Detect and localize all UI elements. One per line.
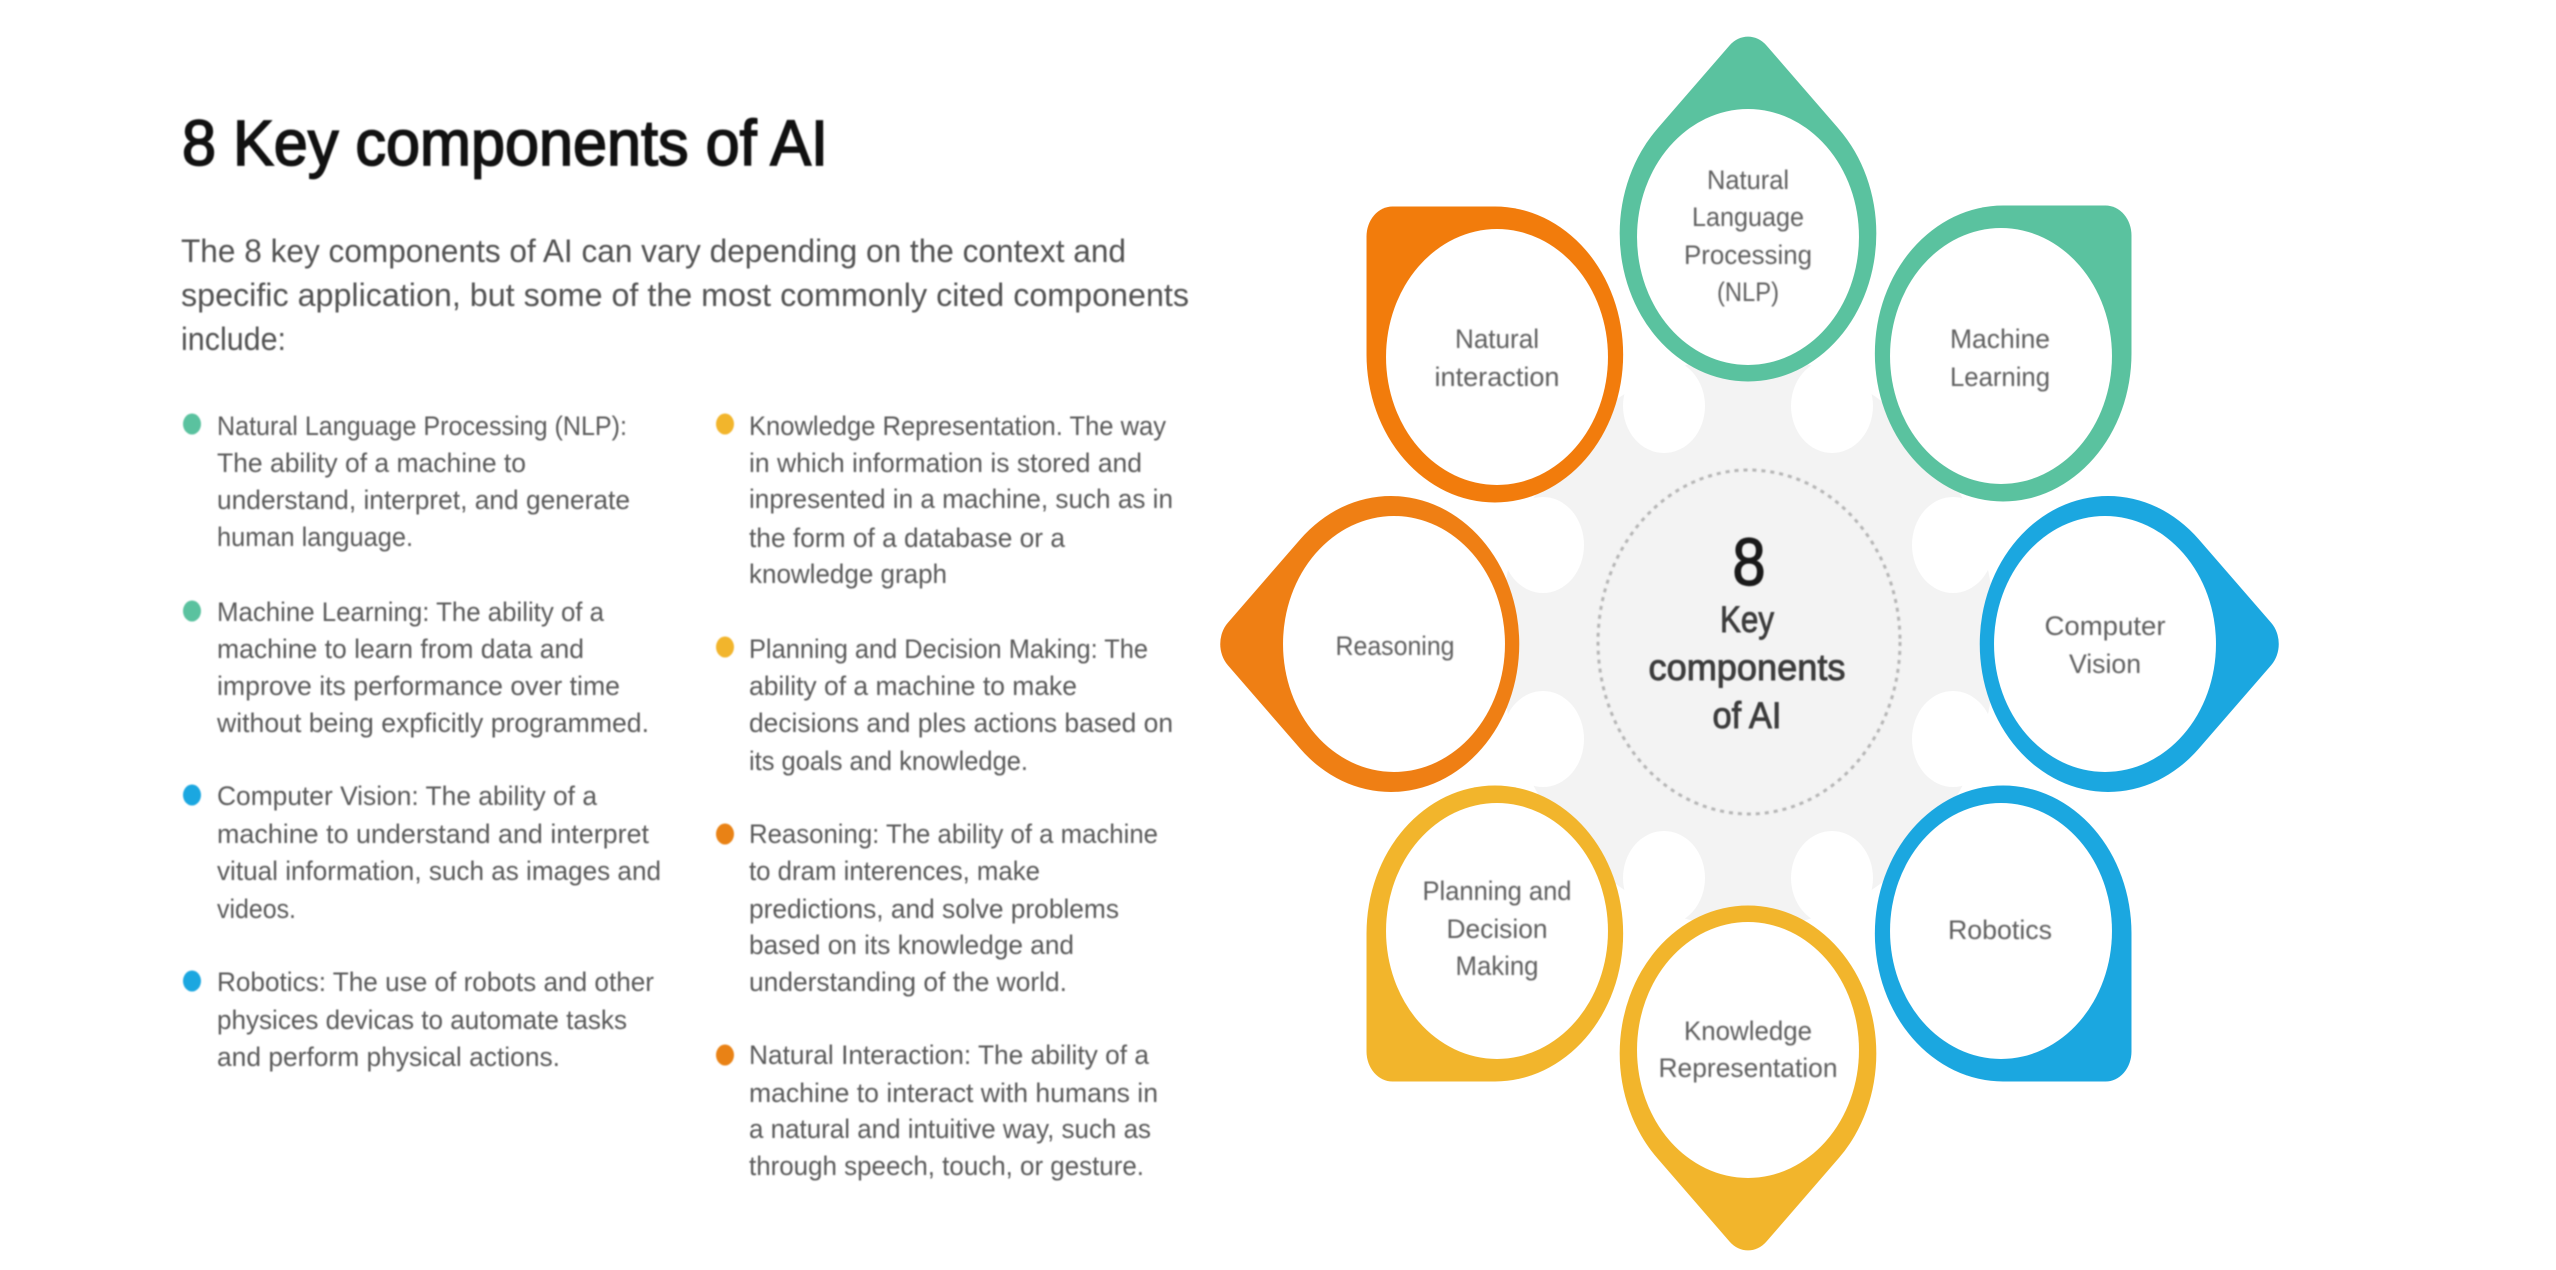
petal: Planning and Decision Making <box>1367 786 1623 1082</box>
petal: Natural Language Processing: Processing <box>1684 240 1812 270</box>
bullet: Computer Vision: Computer Vision: The ability of a <box>217 781 598 811</box>
petal: Robotics <box>1875 786 2131 1082</box>
bullet: Natural Language Processing: understand, interpret, and generate <box>217 485 630 515</box>
bullet: Knowledge Representation: inpresented in a machine, such as in <box>749 484 1173 514</box>
bullet: Reasoning: to dram interences, make <box>749 856 1040 886</box>
bullet: Planning and Decision Making: ability of a machine to make <box>749 671 1077 701</box>
bullet: Computer Vision: videos. <box>217 894 296 924</box>
bullet: Reasoning: understanding of the world. <box>749 967 1067 997</box>
centre label: 8 Key components of AI <box>1598 470 1900 814</box>
bullet: Robotics: Robotics: The use of robots and other <box>217 967 654 997</box>
title: 8 Key components of AI <box>182 107 828 179</box>
bullet: Machine Learning: machine to learn from data and <box>217 634 584 664</box>
intro paragraph: specific application, but some of the most commonly cited components <box>181 277 1189 313</box>
panel: petal diagram <box>1209 24 2290 1263</box>
bullet: Planning and Decision Making: Planning and Decision Making: The <box>749 634 1148 664</box>
petal: Reasoning: Reasoning <box>1336 631 1454 661</box>
bullet: Natural Language Processing <box>183 411 630 552</box>
bullet: Natural Interaction: a natural and intuitive way, such as <box>749 1114 1151 1144</box>
bullet: Natural Interaction: through speech, touch, or gesture. <box>749 1151 1144 1181</box>
petal: Natural Language Processing: Natural <box>1707 165 1789 195</box>
bullet: Knowledge Representation: Knowledge Representation. The way <box>749 411 1166 441</box>
petal: Machine Learning: Machine <box>1950 324 2050 354</box>
bullet: Reasoning: predictions, and solve problems <box>749 894 1119 924</box>
petal: Knowledge Representation <box>1567 844 1929 1263</box>
petal: Planning and Decision Making: Making <box>1456 951 1538 981</box>
bullet: Natural Language Processing: human language. <box>217 522 413 552</box>
petal: Natural Language Processing <box>1567 24 1929 443</box>
petal: Planning and Decision Making: Decision <box>1446 914 1548 944</box>
petal: Natural interaction: Natural <box>1455 324 1539 354</box>
petal: Knowledge Representation: Representation <box>1658 1053 1838 1083</box>
bullet: Natural Language Processing: The ability of a machine to <box>217 448 526 478</box>
bullet: Robotics <box>183 967 654 1072</box>
bullet: Planning and Decision Making: its goals and knowledge. <box>749 746 1028 776</box>
bullet: Robotics: physices devicas to automate tasks <box>217 1005 627 1035</box>
petal: Natural interaction: interaction <box>1434 362 1560 392</box>
petal: Knowledge Representation: Knowledge <box>1684 1016 1812 1046</box>
petal: Natural Language Processing: Language <box>1692 202 1804 232</box>
petal: Robotics: Robotics <box>1948 915 2052 945</box>
bullet: Knowledge Representation: in which information is stored and <box>749 448 1142 478</box>
bullet: Machine Learning: without being expficitly programmed. <box>216 708 649 738</box>
bullet: Machine Learning: improve its performance over time <box>217 671 620 701</box>
centre label: 8 Key components of AI: 8 <box>1732 525 1766 600</box>
petal: Computer Vision: Vision <box>2069 649 2141 679</box>
intro paragraph: The 8 key components of AI can vary depending on the context and <box>181 233 1126 269</box>
centre label: 8 Key components of AI: of AI <box>1712 695 1782 736</box>
petal: Natural Language Processing: (NLP) <box>1717 277 1779 307</box>
petal: Computer Vision: Computer <box>2044 611 2166 641</box>
petal: Planning and Decision Making: Planning and <box>1422 876 1572 906</box>
bullet: Knowledge Representation: the form of a database or a <box>749 523 1066 553</box>
petal: Computer Vision <box>1927 435 2290 853</box>
bullet: Reasoning <box>716 819 1158 997</box>
bullet: Computer Vision: vitual information, such as images and <box>217 856 661 886</box>
bullet: Computer Vision: machine to understand and interpret <box>217 819 649 849</box>
petal: Machine Learning <box>1875 206 2131 502</box>
central hub background <box>1500 356 1996 928</box>
bullet: Natural Interaction: machine to interact with humans in <box>749 1078 1158 1108</box>
petal: Reasoning <box>1209 435 1572 853</box>
bullet: Natural Interaction <box>716 1040 1158 1181</box>
intro paragraph <box>181 233 1189 357</box>
bullet: Computer Vision <box>183 781 661 924</box>
bullet: Reasoning: based on its knowledge and <box>749 930 1074 960</box>
bullet: Machine Learning: Machine Learning: The ability of a <box>217 597 605 627</box>
bullet: Planning and Decision Making: decisions and ples actions based on <box>749 708 1173 738</box>
bullet: Natural Interaction: Natural Interaction: The ability of a <box>749 1040 1150 1070</box>
petal: Natural interaction <box>1367 206 1623 502</box>
bullet: Knowledge Representation <box>716 411 1173 589</box>
centre label: 8 Key components of AI: components <box>1648 647 1846 688</box>
bullet: Natural Language Processing: Natural Language Processing (NLP): <box>217 411 627 441</box>
bullet: Knowledge Representation: knowledge graph <box>749 559 947 589</box>
bullet: Planning and Decision Making <box>716 634 1173 776</box>
panel: text column <box>181 107 1189 1181</box>
petal: Machine Learning: Learning <box>1950 362 2050 392</box>
bullet: Reasoning: Reasoning: The ability of a machine <box>749 819 1158 849</box>
intro paragraph: include: <box>181 321 286 357</box>
bullet: Robotics: and perform physical actions. <box>217 1042 560 1072</box>
centre label: 8 Key components of AI: Key <box>1720 599 1774 640</box>
bullet: Machine Learning <box>183 597 649 738</box>
